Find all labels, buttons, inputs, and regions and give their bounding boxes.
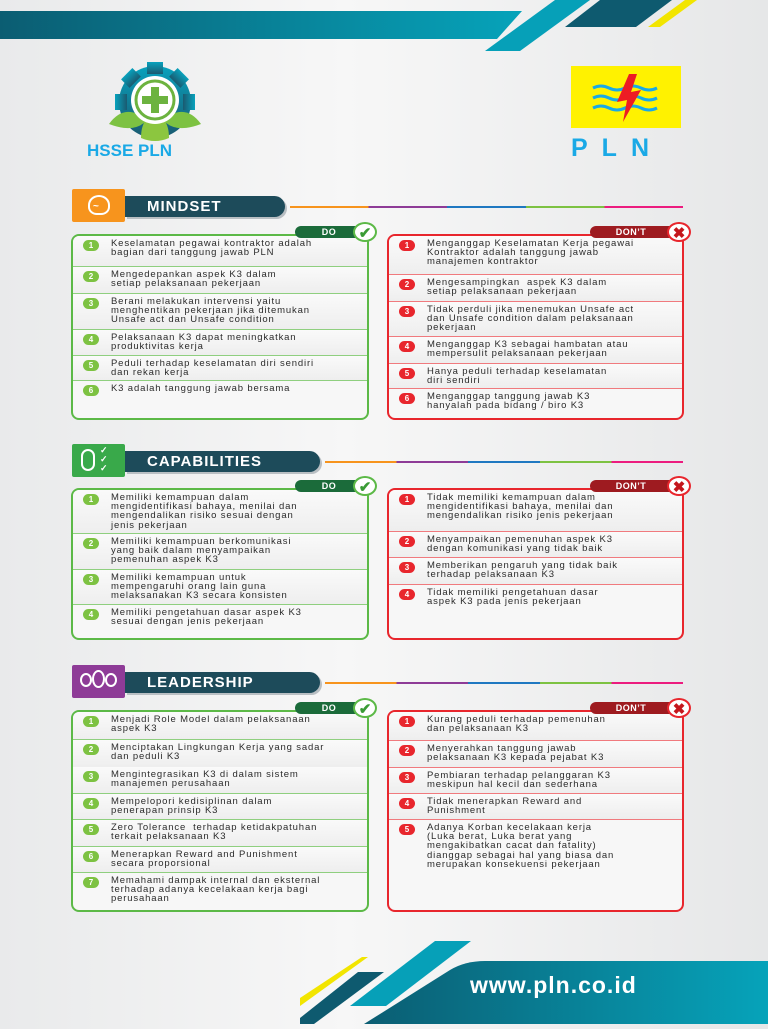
panel: leadership DON'T: Kurang peduli terhadap pemenuhan bbox=[427, 714, 606, 725]
panel: mindset DO: 3 bbox=[89, 299, 93, 308]
panel: leadership DON'T: dan pelaksanaan K3 bbox=[427, 723, 529, 734]
panel: mindset DON'T: hanyalah pada bidang / biro K3 bbox=[427, 400, 584, 411]
panel: leadership DO: 5 bbox=[89, 825, 93, 834]
icon: person checklist: ✓ bbox=[100, 454, 108, 464]
icon: brain head bbox=[72, 189, 125, 222]
title: CAPABILITIES: CAPABILITIES bbox=[147, 453, 262, 470]
panel: mindset DO: 2 bbox=[89, 272, 93, 281]
badge: DO: ✔ bbox=[359, 701, 371, 718]
panel: capabilities DO: yang baik dalam menyampaikan bbox=[111, 545, 271, 556]
panel: mindset DO: Berani melakukan intervensi yaitu bbox=[111, 296, 281, 307]
section: LEADERSHIP header bbox=[72, 665, 683, 698]
panel: leadership DO: 1 bbox=[89, 717, 93, 726]
badge: DON'T: ✖ bbox=[673, 225, 685, 242]
panel: mindset DON'T: Menganggap tanggung jawab K3 bbox=[427, 391, 590, 402]
logo: PLN: PLN bbox=[571, 134, 663, 162]
panel: capabilities DO: Memiliki pengetahuan dasar aspek K3 bbox=[111, 607, 302, 618]
title: LEADERSHIP bbox=[125, 672, 320, 693]
panel: leadership DON'T: 4 bbox=[405, 799, 409, 808]
panel: capabilities DO: mempengaruhi orang lain guna bbox=[111, 581, 266, 592]
panel: leadership DON'T: meskipun hal kecil dan sederhana bbox=[427, 779, 598, 790]
panel: mindset DON'T: pekerjaan bbox=[427, 322, 476, 333]
badge: DON'T: DON’T bbox=[616, 703, 646, 713]
badge: DO bbox=[295, 476, 377, 496]
panel: leadership DO: terhadap adanya kecelakaan kerja bagi bbox=[111, 884, 308, 895]
website url: www.pln.co.id bbox=[470, 972, 637, 998]
panel: capabilities DON'T: Tidak memiliki pengetahuan dasar bbox=[427, 587, 599, 598]
panel: mindset DON'T: 1 bbox=[405, 241, 409, 250]
panel: mindset DON'T: Menganggap Keselamatan Kerja pegawai bbox=[427, 238, 634, 249]
panel: mindset DON'T: 4 bbox=[405, 342, 409, 351]
panel: mindset DO: 4 bbox=[89, 335, 93, 344]
panel: leadership DO: Zero Tolerance terhadap ketidakpatuhan bbox=[111, 822, 317, 833]
panel: leadership DON'T: pelaksanaan K3 kepada pejabat K3 bbox=[427, 752, 604, 763]
panel: leadership DO: aspek K3 bbox=[111, 723, 157, 734]
panel: mindset DO: 5 bbox=[89, 361, 93, 370]
panel: leadership DO bbox=[71, 710, 369, 912]
panel: mindset DO: setiap pelaksanaan pekerjaan bbox=[111, 278, 261, 289]
panel: leadership DON'T: Punishment bbox=[427, 805, 486, 816]
panel: leadership DON'T: 5 bbox=[405, 825, 409, 834]
panel: mindset DO: Pelaksanaan K3 dapat meningkatkan bbox=[111, 332, 296, 343]
panel: mindset DON'T: diri sendiri bbox=[427, 375, 480, 386]
panel: mindset DON'T: 2 bbox=[405, 280, 409, 289]
panel: capabilities DON'T: 4 bbox=[405, 590, 409, 599]
panel: mindset DON'T: Menganggap K3 sebagai hambatan atau bbox=[427, 339, 628, 350]
panel: leadership DO: terkait pelaksanaan K3 bbox=[111, 831, 226, 842]
badge: DO: DO bbox=[322, 703, 336, 713]
panel: mindset DO: menghentikan pekerjaan jika ditemukan bbox=[111, 305, 310, 316]
panel: capabilities DON'T: terhadap pelaksanaan K3 bbox=[427, 569, 555, 580]
badge: DO: DO bbox=[322, 481, 336, 491]
badge: DO: ✔ bbox=[359, 479, 371, 496]
panel: mindset DO: Unsafe act dan Unsafe condition bbox=[111, 314, 275, 325]
panel: mindset DON'T: manajemen kontraktor bbox=[427, 256, 539, 267]
badge: DO: DO bbox=[322, 227, 336, 237]
panel: capabilities DON'T: 2 bbox=[405, 537, 409, 546]
panel: leadership DO: secara proporsional bbox=[111, 858, 211, 869]
panel: mindset DO: dan rekan kerja bbox=[111, 367, 189, 378]
panel: mindset DON'T: Tidak perduli jika menemukan Unsafe act bbox=[427, 304, 634, 315]
badge: DON'T bbox=[590, 698, 691, 718]
panel: leadership DO: 3 bbox=[89, 772, 93, 781]
panel: leadership DON'T bbox=[387, 710, 684, 912]
panel: mindset DO: produktivitas kerja bbox=[111, 341, 204, 352]
panel: capabilities DON'T: 3 bbox=[405, 563, 409, 572]
logo: PLN bbox=[571, 66, 681, 162]
panel: capabilities DO: mengidentifikasi bahaya, menilai dan bbox=[111, 501, 297, 512]
panel: leadership DON'T: Adanya Korban kecelakaan kerja bbox=[427, 822, 592, 833]
panel: leadership DON'T: Tidak menerapkan Reward and bbox=[427, 796, 582, 807]
panel: leadership DO: 4 bbox=[89, 799, 93, 808]
panel: mindset DO: Peduli terhadap keselamatan diri sendiri bbox=[111, 358, 314, 369]
title: CAPABILITIES bbox=[125, 451, 320, 472]
panel: leadership DON'T: mengakibatkan cacat dan fatality) bbox=[427, 840, 597, 851]
icon: group bbox=[72, 665, 125, 698]
panel: mindset DON'T: 3 bbox=[405, 307, 409, 316]
footer band bbox=[300, 941, 768, 1024]
panel: capabilities DO: sesuai dengan jenis pekerjaan bbox=[111, 616, 264, 627]
panel: mindset DON'T: 5 bbox=[405, 369, 409, 378]
title: MINDSET: MINDSET bbox=[147, 198, 222, 215]
panel: capabilities DON'T: mengidentifikasi bahaya, menilai dan bbox=[427, 501, 613, 512]
panel: mindset DON'T: Kontraktor adalah tanggung jawab bbox=[427, 247, 599, 258]
panel: mindset DO: Mengedepankan aspek K3 dalam bbox=[111, 269, 276, 280]
panel: leadership DO: Menciptakan Lingkungan Kerja yang sadar bbox=[111, 742, 324, 753]
panel: capabilities DON'T: mengendalikan risiko jenis pekerjaan bbox=[427, 510, 613, 521]
panel: capabilities DON'T: Memberikan pengaruh yang tidak baik bbox=[427, 560, 618, 571]
panel: mindset DON'T: setiap pelaksanaan pekerjaan bbox=[427, 286, 577, 297]
icon: person checklist: ✓ bbox=[100, 463, 108, 473]
panel: leadership DO: penerapan prinsip K3 bbox=[111, 805, 218, 816]
panel: leadership DO: Memahami dampak internal dan eksternal bbox=[111, 875, 320, 886]
panel: capabilities DO bbox=[71, 488, 369, 640]
panel: leadership DON'T: 3 bbox=[405, 773, 409, 782]
icon: brain head: ~ bbox=[93, 201, 99, 212]
panel: capabilities DO: pemenuhan aspek K3 bbox=[111, 554, 219, 565]
badge: DO bbox=[295, 222, 377, 242]
panel: leadership DO: 6 bbox=[89, 852, 93, 861]
panel: mindset DON'T: mempersulit pelaksanaan pekerjaan bbox=[427, 348, 608, 359]
panel: leadership DON'T: 2 bbox=[405, 746, 409, 755]
panel: leadership DON'T: (Luka berat, Luka berat yang bbox=[427, 831, 572, 842]
badge: DON'T: DON’T bbox=[616, 227, 646, 237]
panel: capabilities DON'T: Tidak memiliki kemampuan dalam bbox=[427, 492, 596, 503]
panel: capabilities DO: 1 bbox=[89, 495, 93, 504]
icon: person checklist: ✓ bbox=[100, 445, 108, 455]
panel: leadership DON'T: dianggap sebagai hal yang biasa dan bbox=[427, 850, 614, 861]
header band bbox=[0, 0, 697, 51]
panel: mindset DON'T: Mengesampingkan aspek K3 dalam bbox=[427, 277, 607, 288]
panel: capabilities DON'T: dengan komunikasi yang tidak baik bbox=[427, 543, 603, 554]
badge: DON'T: ✖ bbox=[673, 479, 685, 496]
panel: mindset DO: 6 bbox=[89, 386, 93, 395]
section: MINDSET header bbox=[72, 189, 683, 222]
panel: leadership DO: dan peduli K3 bbox=[111, 751, 180, 762]
badge: DO: ✔ bbox=[359, 225, 371, 242]
title: LEADERSHIP: LEADERSHIP bbox=[147, 674, 254, 691]
panel: capabilities DO: 2 bbox=[89, 539, 93, 548]
panel: capabilities DO: 4 bbox=[89, 610, 93, 619]
panel: leadership DON'T: merupakan konsekuensi pekerjaan bbox=[427, 859, 601, 870]
panel: leadership DON'T: 1 bbox=[405, 717, 409, 726]
panel: leadership DO: 2 bbox=[89, 745, 93, 754]
badge: DON'T: ✖ bbox=[673, 701, 685, 718]
panel: leadership DO: 7 bbox=[89, 878, 93, 887]
panel: leadership DON'T: Pembiaran terhadap pelanggaran K3 bbox=[427, 770, 611, 781]
panel: capabilities DO: 3 bbox=[89, 575, 93, 584]
badge: DON'T bbox=[590, 476, 691, 496]
panel: leadership DO: perusahaan bbox=[111, 893, 170, 904]
panel: leadership DO: Mempelopori kedisiplinan dalam bbox=[111, 796, 272, 807]
badge: DON'T bbox=[590, 222, 691, 242]
icon: person checklist bbox=[72, 444, 125, 477]
title: MINDSET bbox=[125, 196, 285, 217]
panel: leadership DO: Mengintegrasikan K3 di dalam sistem bbox=[111, 769, 299, 780]
panel: mindset DON'T: Hanya peduli terhadap keselamatan bbox=[427, 366, 607, 377]
panel: leadership DO: Menerapkan Reward and Punishment bbox=[111, 849, 298, 860]
panel: capabilities DO: Memiliki kemampuan dalam bbox=[111, 492, 249, 503]
panel: mindset DO: Keselamatan pegawai kontraktor adalah bbox=[111, 238, 312, 249]
panel: leadership DO: manajemen perusahaan bbox=[111, 778, 230, 789]
panel: capabilities DO: Memiliki kemampuan berkomunikasi bbox=[111, 536, 291, 547]
logo: HSSE PLN: HSSE PLN bbox=[87, 141, 172, 160]
section: CAPABILITIES header bbox=[72, 444, 683, 477]
panel: mindset DON'T: 6 bbox=[405, 394, 409, 403]
panel: mindset DO bbox=[71, 234, 369, 420]
panel: capabilities DO: mengendalikan risiko sesuai dengan bbox=[111, 510, 294, 521]
panel: capabilities DON'T: 1 bbox=[405, 495, 409, 504]
panel: capabilities DON'T bbox=[387, 488, 684, 640]
panel: capabilities DO: Memiliki kemampuan untuk bbox=[111, 572, 246, 583]
panel: mindset DON'T: dan Unsafe condition dalam pelaksanaan bbox=[427, 313, 634, 324]
panel: leadership DO: Menjadi Role Model dalam pelaksanaan bbox=[111, 714, 311, 725]
panel: mindset DO: 1 bbox=[89, 241, 93, 250]
panel: mindset DO: bagian dari tanggung jawab PLN bbox=[111, 247, 274, 258]
badge: DO bbox=[295, 698, 377, 718]
panel: mindset DON'T bbox=[387, 234, 684, 420]
badge: DON'T: DON’T bbox=[616, 481, 646, 491]
panel: mindset DO: K3 adalah tanggung jawab bersama bbox=[111, 383, 290, 394]
panel: capabilities DO: jenis pekerjaan bbox=[111, 520, 188, 531]
panel: capabilities DO: melaksanakan K3 secara konsisten bbox=[111, 590, 288, 601]
panel: capabilities DON'T: Menyampaikan pemenuhan aspek K3 bbox=[427, 534, 613, 545]
panel: leadership DON'T: Menyerahkan tanggung jawab bbox=[427, 743, 576, 754]
logo: HSSE PLN bbox=[87, 62, 201, 160]
panel: capabilities DON'T: aspek K3 pada jenis pekerjaan bbox=[427, 596, 582, 607]
